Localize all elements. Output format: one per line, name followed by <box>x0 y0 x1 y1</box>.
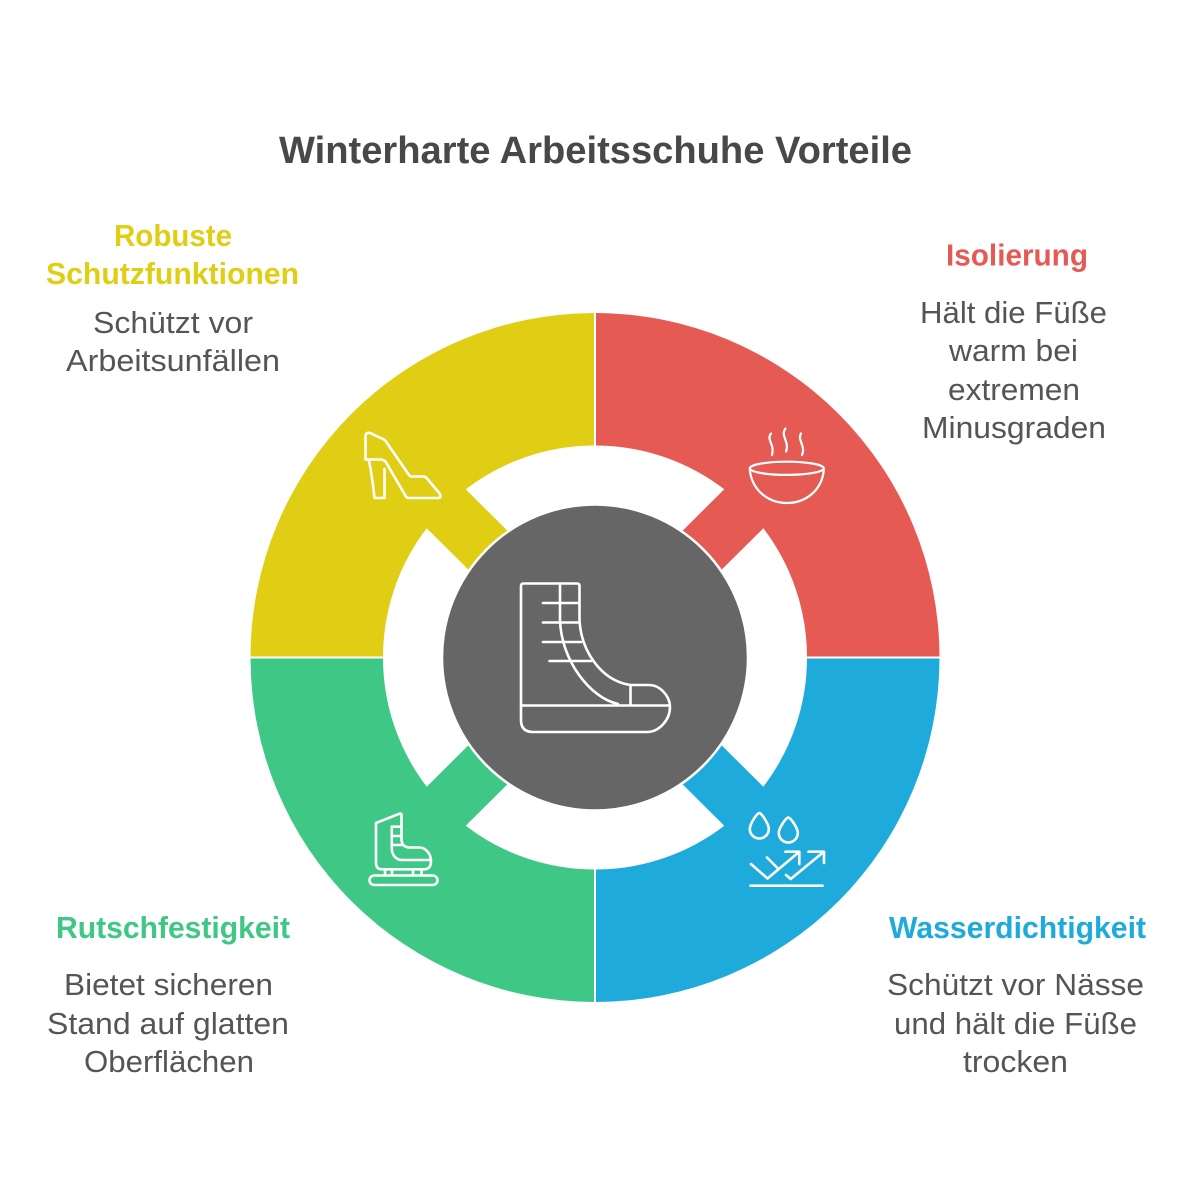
heading: Rutschfestigkeit: Rutschfestigkeit <box>56 910 290 945</box>
text: Schützt vor Arbeitsunfällen: Schützt vor <box>93 305 253 340</box>
text: Hält die Füße warm bei extremen Minusgraden: extremen <box>948 372 1080 407</box>
text: Schützt vor Nässe und hält die Füße trocken: trocken <box>963 1044 1068 1079</box>
text: Hält die Füße warm bei extremen Minusgraden <box>920 295 1107 445</box>
title: Winterharte Arbeitsschuhe Vorteile <box>279 130 912 172</box>
text: Bietet sicheren Stand auf glatten Oberflächen: Bietet sicheren <box>64 967 273 1002</box>
heading: Isolierung: Isolierung <box>946 238 1088 272</box>
text: Hält die Füße warm bei extremen Minusgraden: warm bei <box>948 333 1078 368</box>
icon: high-heeled shoe <box>366 433 440 498</box>
text: Bietet sicheren Stand auf glatten Oberflächen: Stand auf glatten <box>47 1006 289 1041</box>
text: Schützt vor Nässe und hält die Füße trocken <box>887 967 1144 1079</box>
icon: boot <box>521 584 670 732</box>
segment: Rutschfestigkeit <box>250 658 594 1002</box>
segment: Wasserdichtigkeit <box>596 658 940 1002</box>
label: Rutschfestigkeit <box>47 910 290 1079</box>
label: Isolierung <box>920 238 1107 445</box>
heading: Robuste Schutzfunktionen: Robuste <box>114 218 232 253</box>
heading: Wasserdichtigkeit: Wasserdichtigkeit <box>889 910 1146 945</box>
segment: Isolierung <box>596 313 940 656</box>
center circle <box>442 504 748 810</box>
icon: ice skate <box>370 814 438 885</box>
heading: Robuste Schutzfunktionen <box>46 218 299 291</box>
text: Hält die Füße warm bei extremen Minusgraden: Hält die Füße <box>920 295 1107 330</box>
label: Robuste Schutzfunktionen <box>46 218 299 378</box>
text: Schützt vor Arbeitsunfällen <box>66 305 280 378</box>
text: Schützt vor Nässe und hält die Füße trocken: Schützt vor Nässe <box>887 967 1144 1002</box>
text: Hält die Füße warm bei extremen Minusgraden: Minusgraden <box>922 410 1106 445</box>
heading: Robuste Schutzfunktionen: Schutzfunktionen <box>46 256 299 291</box>
circular diagram <box>250 313 940 1002</box>
segment: Robuste Schutzfunktionen <box>250 313 594 656</box>
label: Wasserdichtigkeit <box>887 910 1146 1079</box>
icon: steaming bowl <box>750 428 824 503</box>
text: Bietet sicheren Stand auf glatten Oberflächen: Oberflächen <box>84 1044 254 1079</box>
text: Bietet sicheren Stand auf glatten Oberflächen <box>47 967 289 1079</box>
icon: water drops and arrows <box>750 813 824 886</box>
text: Schützt vor Nässe und hält die Füße trocken: und hält die Füße <box>894 1006 1137 1041</box>
text: Schützt vor Arbeitsunfällen: Arbeitsunfällen <box>66 343 280 378</box>
